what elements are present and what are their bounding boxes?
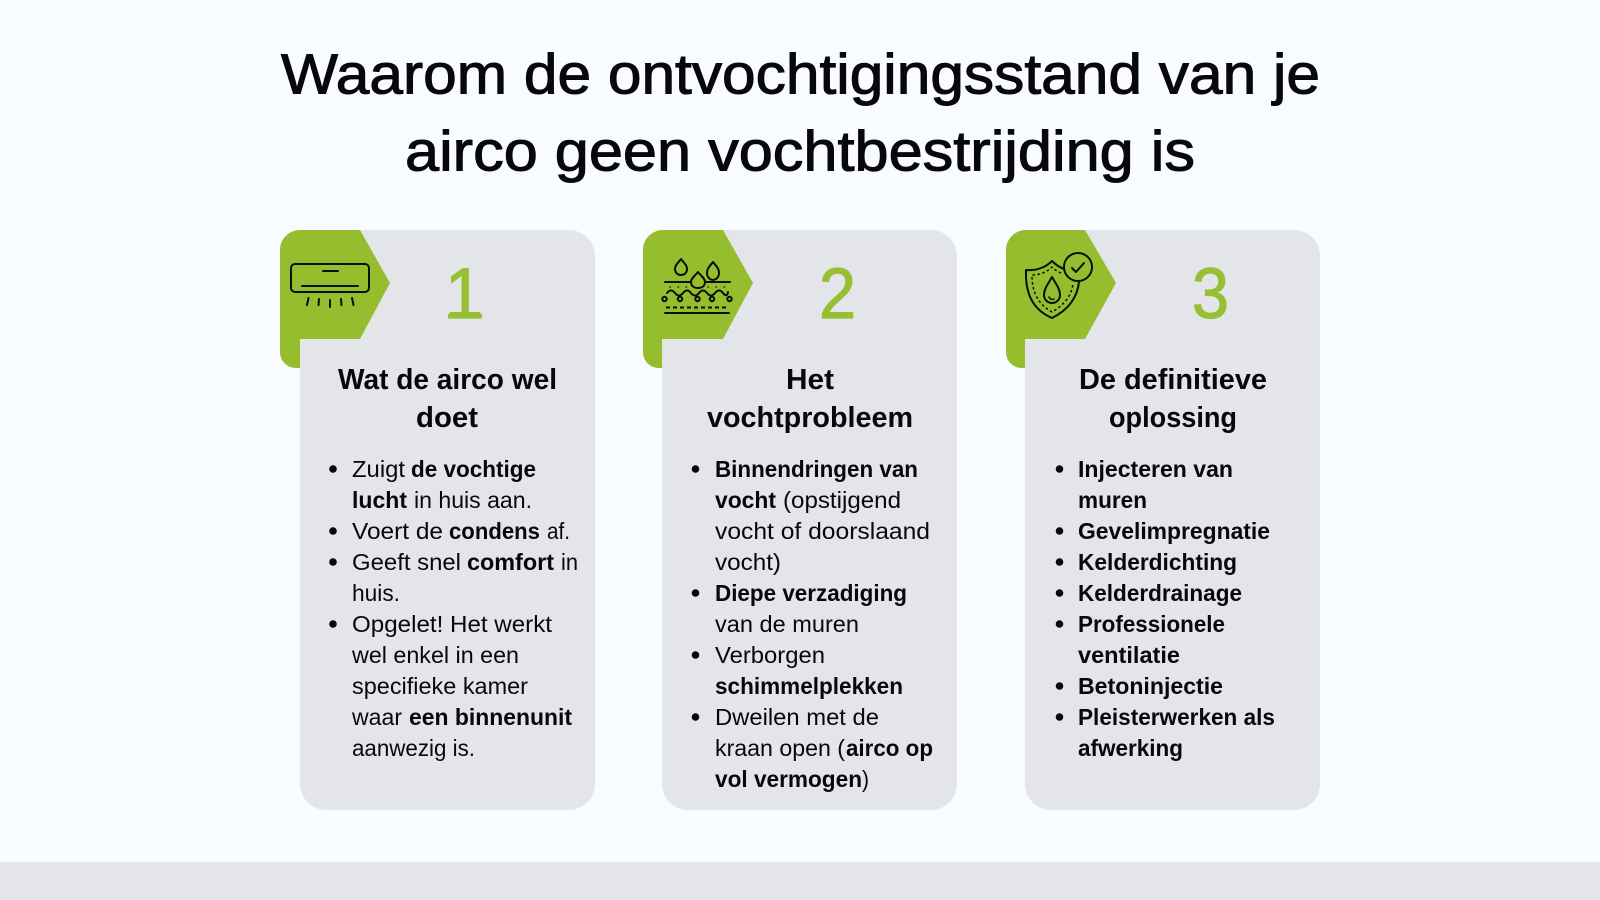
bullet list: vocht) <box>715 549 781 575</box>
bullet list: vocht of doorslaand <box>715 518 930 544</box>
heading: De definitieve <box>1079 364 1267 396</box>
bullet list: comfort <box>467 549 554 575</box>
bullet list: Zuigt <box>352 456 405 482</box>
bullet list: Kelderdichting <box>1078 549 1237 575</box>
icon: air conditioner <box>291 264 369 307</box>
number 3: 3 <box>1192 255 1229 334</box>
icon: shield with drop and check <box>1026 253 1092 318</box>
bullet list: airco op <box>846 735 933 761</box>
bullet list <box>329 456 578 761</box>
heading: vochtprobleem <box>707 402 913 434</box>
card background <box>300 230 595 810</box>
bullet list: muren <box>1078 487 1147 513</box>
bullet list: schimmelplekken <box>715 673 903 699</box>
panel: het vochtprobleem <box>643 230 957 810</box>
bullet list: condens <box>449 518 540 544</box>
heading <box>1079 364 1267 434</box>
bullet list: (opstijgend <box>783 487 901 513</box>
bullet list: kraan open ( <box>715 735 845 761</box>
panel: wat de airco wel doet <box>280 230 595 810</box>
heading <box>707 364 913 434</box>
bullet list: in <box>561 549 578 575</box>
bullet list: een binnenunit <box>409 704 572 730</box>
title <box>281 42 1320 184</box>
bullet list: afwerking <box>1078 735 1183 761</box>
bullet list: lucht <box>352 487 407 513</box>
bullet list: van de muren <box>715 611 859 637</box>
heading: Wat de airco wel <box>338 364 557 396</box>
bullet list: Gevelimpregnatie <box>1078 518 1270 544</box>
bullet list: wel enkel in een <box>351 642 519 668</box>
bullet list: Opgelet! Het werkt <box>352 611 552 637</box>
bullet list: Betoninjectie <box>1078 673 1223 699</box>
bullet list: Kelderdrainage <box>1078 580 1242 606</box>
icon: moisture in wall <box>662 259 732 313</box>
bullet list: af. <box>547 518 570 544</box>
bullet list: de vochtige <box>411 456 536 482</box>
card background <box>662 230 957 810</box>
bullet list: Diepe verzadiging <box>715 580 907 606</box>
bullet list: vocht <box>715 487 776 513</box>
bullet list: ) <box>862 766 869 792</box>
bullet list: Pleisterwerken als <box>1078 704 1275 730</box>
heading: doet <box>416 402 478 434</box>
footer band <box>0 862 1600 900</box>
title: Waarom de ontvochtigingsstand van je <box>281 42 1320 106</box>
bullet list: waar <box>351 704 402 730</box>
green badge <box>280 230 390 368</box>
green badge <box>1006 230 1116 368</box>
bullet list: Injecteren van <box>1078 456 1233 482</box>
number 1: 1 <box>445 255 483 334</box>
bullet list: Geeft snel <box>352 549 461 575</box>
heading: oplossing <box>1109 402 1237 434</box>
heading <box>338 364 557 434</box>
bullet list <box>692 456 933 792</box>
bullet list: ventilatie <box>1078 642 1180 668</box>
bullet list: in huis aan. <box>414 487 532 513</box>
bullet list: specifieke kamer <box>352 673 528 699</box>
bullet list: Dweilen met de <box>715 704 879 730</box>
bullet list: aanwezig is. <box>352 735 475 761</box>
bullet list: Professionele <box>1078 611 1225 637</box>
heading: Het <box>786 364 834 396</box>
bullet list: Voert de <box>352 518 443 544</box>
bullet list: Binnendringen van <box>715 456 918 482</box>
title: airco geen vochtbestrijding is <box>405 120 1195 184</box>
bullet list <box>1056 456 1275 761</box>
bullet list: huis. <box>352 580 400 606</box>
panel: de definitieve oplossing <box>1006 230 1320 810</box>
bullet list: Verborgen <box>715 642 825 668</box>
green badge <box>643 230 753 368</box>
bullet list: vol vermogen <box>715 766 862 792</box>
number 2: 2 <box>819 255 856 334</box>
card background <box>1025 230 1320 810</box>
